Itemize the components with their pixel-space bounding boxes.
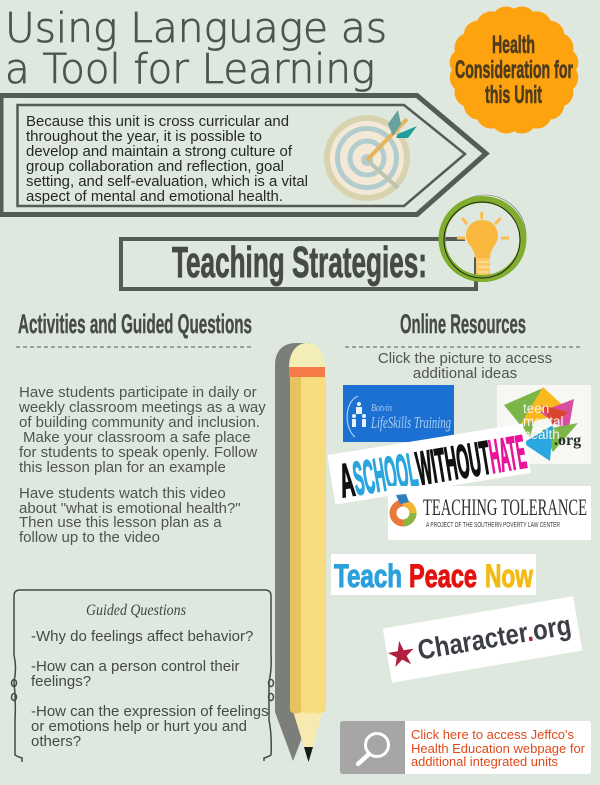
text: click the picture: additional ideas <box>413 365 517 382</box>
title: a Tool for Learning <box>5 45 375 93</box>
badge: health consideration: this Unit <box>485 81 542 109</box>
arrow panel: health consideration text <box>0 95 486 215</box>
text: activities: Then use this lesson plan as a <box>19 514 222 531</box>
logo: teach peace now: Teach <box>334 558 402 594</box>
heading box: teaching strategies <box>121 238 476 289</box>
panel: guided questions <box>12 590 274 762</box>
logo: Botvin LifeSkills Training: Botvin <box>371 402 392 414</box>
questions list: -Why do feelings affect behavior? <box>31 628 253 645</box>
text: activities: for students to speak openly. Follow <box>19 444 257 461</box>
button: Jeffco health education link: Click here to access Jeffco's <box>411 727 574 742</box>
paragraph: throughout the year, it is possible to <box>26 128 262 145</box>
text: activities: this lesson plan for an example <box>19 459 226 476</box>
text: activities: Have students watch this video <box>19 485 226 502</box>
paragraph: setting, and self-evaluation, which is a vital <box>26 173 308 190</box>
text: click the picture <box>378 350 552 382</box>
logo: a school without hate: A <box>335 453 358 507</box>
text: activities <box>18 384 266 546</box>
icon: light bulb in ring <box>442 195 526 278</box>
text: activities: about "what is emotional health?" <box>19 500 241 517</box>
text: click the picture: Click the picture to access <box>378 350 552 367</box>
badge: health consideration <box>451 8 577 132</box>
logo: Botvin LifeSkills Training: LifeSkills Training <box>370 413 451 432</box>
button: Jeffco health education link: Health Education webpage for <box>411 741 586 756</box>
logo: teach peace now: Now <box>485 558 533 594</box>
logo: teen mental health <box>497 385 591 464</box>
text: activities: follow up to the video <box>19 529 160 546</box>
icon: target with arrow <box>324 110 417 201</box>
logo: character.org <box>383 596 582 683</box>
questions list: or emotions help or hurt you and <box>31 718 247 735</box>
button: Jeffco health education link <box>340 721 591 774</box>
questions list: feelings? <box>31 673 91 690</box>
logo: teen mental health: mental <box>523 414 564 429</box>
logo: character.org: Character.org <box>415 609 573 666</box>
icon: pencil <box>275 343 326 762</box>
paragraph: Because this unit is cross curricular and <box>26 113 289 130</box>
logo: a school without hate: SCHOOL <box>349 442 421 505</box>
questions list: -How can the expression of feelings <box>31 703 269 720</box>
text: activities: Have students participate in daily or <box>19 384 257 401</box>
questions list: -How can a person control their <box>31 658 239 675</box>
text: activities: weekly classroom meetings as a way <box>18 399 266 416</box>
guided questions heading: Guided Questions <box>86 602 186 619</box>
badge: health consideration: Health <box>492 31 535 59</box>
questions list <box>31 628 269 750</box>
title <box>5 4 387 93</box>
paragraph: group collaboration and reflection, goal <box>26 158 284 175</box>
heading: activities and guided questions: Activities and Guided Questions <box>18 309 252 339</box>
text: activities: of building community and inclusion. <box>19 414 260 431</box>
questions list: others? <box>31 733 81 750</box>
heading box: teaching strategies: Teaching Strategies: <box>172 238 427 287</box>
paragraph: develop and maintain a strong culture of <box>26 143 293 160</box>
paragraph: aspect of mental and emotional health. <box>26 188 283 205</box>
icon: magnifying glass <box>358 734 388 764</box>
button: Jeffco health education link: additional integrated units <box>411 754 558 769</box>
logo: teach peace now <box>331 554 536 595</box>
logo: teen mental health: health <box>523 427 560 442</box>
logo: Botvin LifeSkills Training <box>343 385 454 442</box>
logo: teen mental health: teen <box>523 401 549 416</box>
text: activities: Make your classroom a safe place <box>23 429 251 446</box>
logo: teen mental health: .org <box>554 432 581 449</box>
title: Using Language as <box>5 4 387 52</box>
logo: teach peace now: Peace <box>409 558 477 594</box>
logo: teaching tolerance <box>388 486 591 540</box>
paragraph <box>26 113 308 205</box>
